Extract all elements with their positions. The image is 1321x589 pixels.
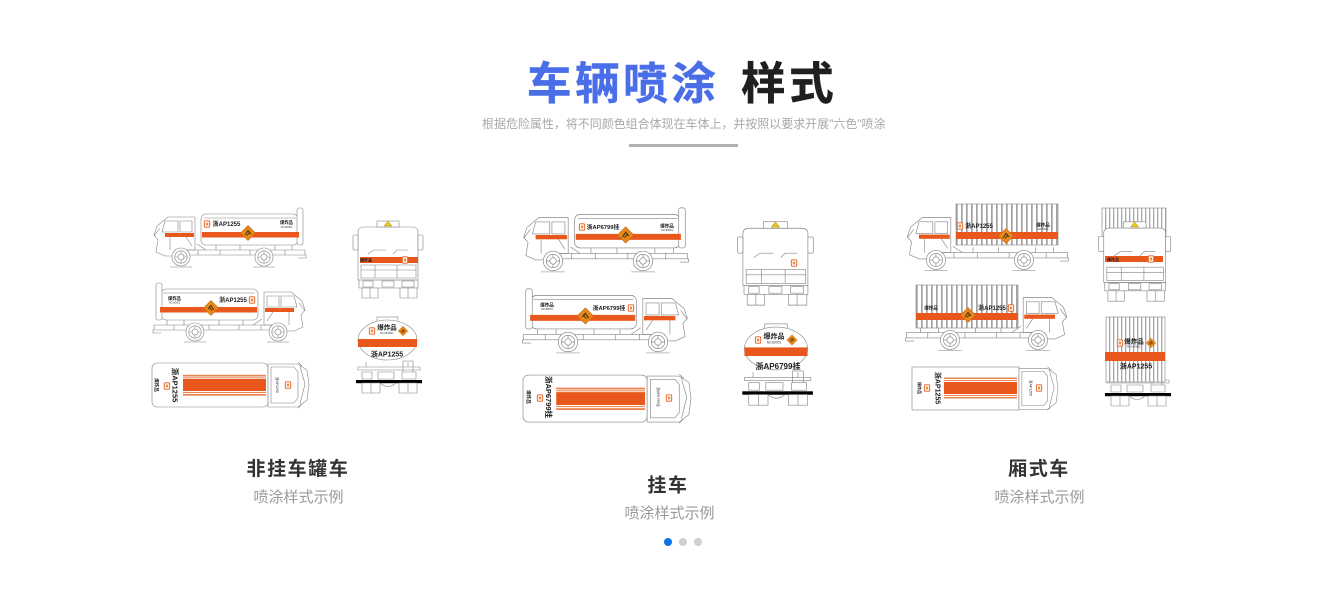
side view, cab left: 爆炸品 [280, 219, 293, 226]
side view, cab right: 爆炸品 [168, 295, 181, 302]
side view, cab right: 浙AP1255 [978, 304, 1007, 312]
caption: box truck: 厢式车 [1008, 457, 1070, 480]
side view, cab left [907, 204, 1068, 271]
panel: box truck [906, 204, 1171, 506]
front view: 爆炸品 [360, 256, 372, 262]
front view [1099, 208, 1171, 301]
panel: non-trailer tanker [152, 208, 423, 506]
top view [523, 374, 691, 423]
side view, cab right [522, 289, 687, 353]
rear view [1105, 317, 1171, 406]
caption: non-trailer tanker: 非挂车罐车 [246, 457, 350, 480]
side view, cab left: NO.80001 [281, 226, 293, 229]
caption: trailer [624, 474, 715, 522]
side view, cab right: 爆炸品 [540, 302, 554, 308]
title [527, 60, 837, 109]
top view: 爆炸品 [525, 390, 532, 404]
title: 样式 [741, 60, 837, 109]
rear view: 爆炸品 [764, 332, 784, 340]
caption: non-trailer tanker: 喷涂样式示例 [253, 489, 344, 506]
rear view: 爆炸品 [1124, 336, 1144, 346]
rear view: 浙AP6799挂 [756, 361, 800, 371]
rear view: 浙AP1255 [1120, 362, 1152, 370]
title: 车辆喷涂 [527, 60, 719, 109]
front view [353, 221, 423, 298]
top view: 浙AP6799挂 [656, 387, 661, 407]
side view, cab left: 爆炸品 [660, 222, 674, 230]
top view: 爆炸品 [917, 382, 923, 394]
side view, cab left: 浙AP1255 [213, 220, 241, 228]
top view: 浙AP1255 [1028, 380, 1034, 396]
rear view [742, 324, 813, 405]
front view [737, 222, 813, 305]
truck illustrations: box truck [906, 204, 1171, 410]
rear view [356, 317, 422, 393]
subtitle: 根据危险属性，将不同颜色组合体现在车体上，并按照以要求开展"六色"喷涂 [482, 116, 886, 131]
side view, cab left: 浙AP1255 [965, 222, 994, 230]
top view: 爆炸品 [153, 378, 160, 392]
caption: box truck [994, 457, 1085, 506]
truck illustrations: non-trailer tanker [152, 208, 423, 408]
panel: trailer [522, 208, 813, 522]
rear view: 爆炸品 [377, 322, 397, 332]
side view, cab left [154, 208, 306, 267]
rear view: NO.80001 [380, 331, 394, 335]
side view, cab right: 浙AP6799挂 [593, 304, 625, 312]
side view, cab left: 爆炸品 [1036, 222, 1050, 228]
side view, cab left: 浙AP6799挂 [587, 223, 619, 231]
top view [152, 362, 309, 408]
top view: 浙AP1255 [170, 368, 180, 402]
carousel pagination dots [664, 538, 702, 546]
side view, cab right: NO.80001 [541, 307, 553, 311]
side view, cab left [524, 208, 689, 272]
rear view: 浙AP1255 [371, 350, 403, 358]
side view, cab left: NO.80001 [1037, 228, 1049, 231]
truck illustrations: trailer [522, 208, 813, 423]
caption: non-trailer tanker [246, 457, 350, 506]
top view: 浙AP1255 [934, 372, 942, 404]
side view, cab right [153, 283, 305, 342]
top view [912, 367, 1058, 410]
rear view: NO.80001 [1127, 344, 1141, 348]
side view, cab left: NO.80001 [661, 228, 673, 232]
title divider [629, 144, 738, 147]
side view, cab right: NO.80001 [169, 302, 181, 304]
top view: 浙AP6799挂 [544, 376, 554, 419]
side view, cab right [906, 285, 1067, 351]
caption: box truck: 喷涂样式示例 [994, 489, 1085, 506]
front view: 爆炸品 [1107, 256, 1119, 262]
side view, cab right: 爆炸品 [924, 304, 938, 312]
top view: 浙AP1255 [275, 377, 280, 393]
rear view: NO.80001 [767, 340, 781, 344]
side view, cab right: 浙AP1255 [219, 296, 248, 304]
caption: trailer: 挂车 [647, 474, 689, 496]
caption: trailer: 喷涂样式示例 [624, 505, 715, 522]
